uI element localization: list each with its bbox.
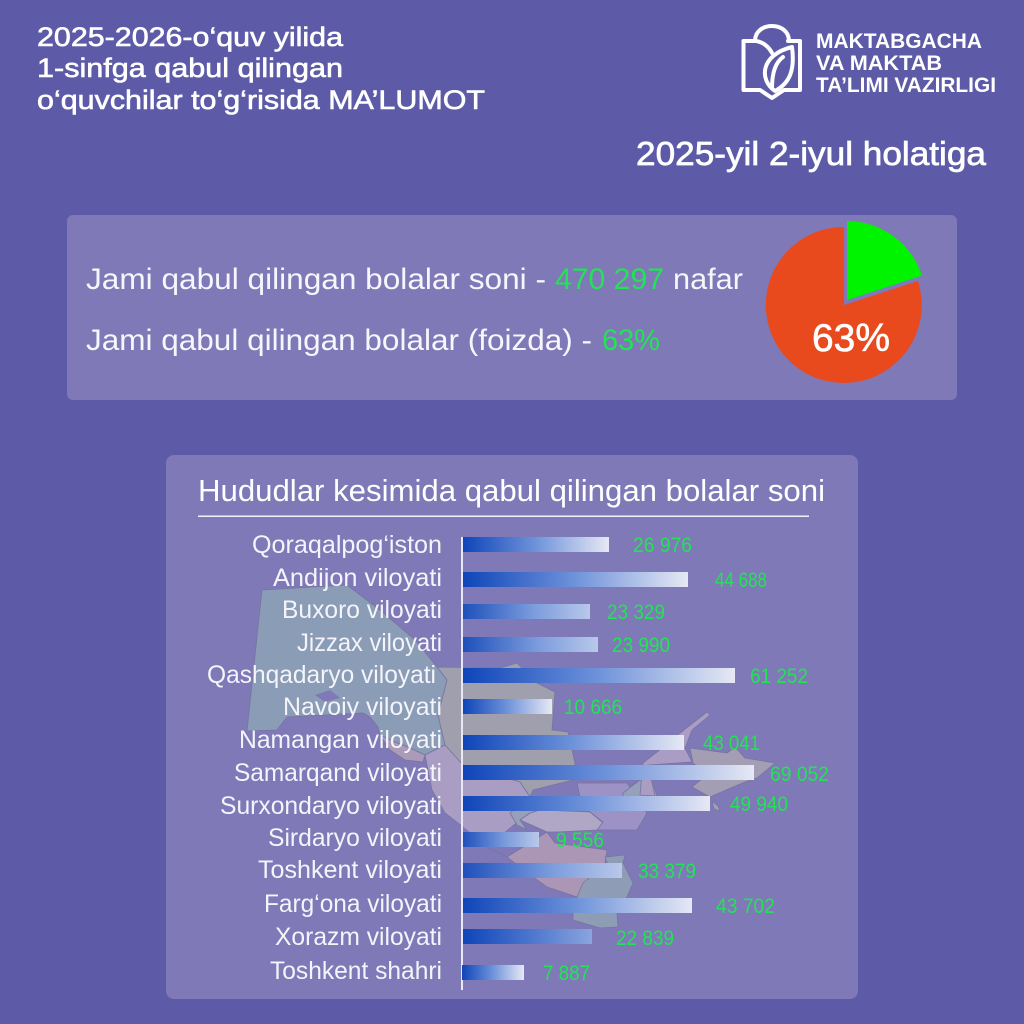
row: Namangan viloyati: Namangan viloyati (239, 726, 442, 754)
row: Toshkent shahri: 7 887 (543, 962, 590, 985)
row: Andijon viloyati: Andijon viloyati (273, 564, 442, 592)
row: Surxondaryo viloyati (220, 792, 788, 820)
title: 2025-2026-o‘quv yilida (37, 22, 344, 52)
row: Navoiy viloyati (283, 693, 622, 721)
logo text: MAKTABGACHA (816, 30, 982, 53)
row: Xorazm viloyati: 22 839 (616, 927, 674, 950)
row: Namangan viloyati (239, 726, 760, 755)
row: Buxoro viloyati (282, 596, 665, 624)
row: Farg‘ona viloyati (264, 890, 775, 918)
row: Qashqadaryo viloyati: 61 252 (750, 665, 808, 688)
row: Qashqadaryo viloyati: Qashqadaryo viloyati (207, 661, 436, 689)
row: Jizzax viloyati: 23 990 (612, 634, 670, 657)
row: Qashqadaryo viloyati (207, 661, 808, 689)
total count text (86, 263, 743, 296)
row: Samarqand viloyati (234, 759, 829, 787)
row: Sirdaryo viloyati: Sirdaryo viloyati (268, 824, 442, 852)
row: Buxoro viloyati: Buxoro viloyati (282, 596, 442, 624)
row: Andijon viloyati: 44 688 (715, 569, 767, 592)
row: Andijon viloyati (273, 564, 767, 592)
icon: open book with leaf (744, 26, 800, 98)
row: Namangan viloyati: 43 041 (703, 732, 760, 755)
axis (461, 537, 463, 990)
row: Buxoro viloyati: 23 329 (607, 601, 665, 624)
total count text: Jami qabul qilingan bolalar soni - (86, 263, 546, 296)
panel: totals (67, 215, 957, 400)
date heading: 2025-yil 2-iyul holatiga (636, 135, 987, 172)
row: Toshkent viloyati (258, 856, 696, 884)
title (37, 22, 485, 115)
row: Toshkent shahri (270, 957, 590, 985)
logo text (816, 30, 996, 97)
row: Xorazm viloyati: Xorazm viloyati (275, 923, 442, 951)
row: Navoiy viloyati: Navoiy viloyati (283, 693, 442, 721)
row: Qoraqalpog‘iston: 26 976 (633, 534, 692, 557)
total percent text: Jami qabul qilingan bolalar (foizda) - (86, 324, 592, 357)
row: Toshkent viloyati: 33 379 (638, 860, 696, 883)
logo: ministry (744, 26, 996, 98)
logo text: VA MAKTAB (816, 52, 942, 75)
row: Surxondaryo viloyati: 49 940 (730, 793, 788, 816)
total percent text: 63% (602, 324, 660, 357)
pie chart (766, 221, 922, 383)
heading underline (198, 516, 809, 517)
row: Xorazm viloyati (275, 923, 674, 951)
total count text: 470 297 (555, 263, 664, 296)
row: Samarqand viloyati: Samarqand viloyati (234, 759, 442, 787)
row: Qoraqalpog‘iston: Qoraqalpog‘iston (252, 531, 442, 559)
row: Jizzax viloyati: Jizzax viloyati (297, 629, 442, 657)
logo text: TA’LIMI VAZIRLIGI (816, 74, 996, 97)
title: o‘quvchilar to‘g‘risida MA’LUMOT (37, 85, 485, 115)
row: Samarqand viloyati: 69 052 (770, 763, 829, 786)
row: Toshkent viloyati: Toshkent viloyati (258, 856, 442, 884)
row: Qoraqalpog‘iston (252, 531, 692, 559)
row: Farg‘ona viloyati: 43 702 (716, 895, 775, 918)
total count text: nafar (673, 263, 743, 296)
row: Sirdaryo viloyati: 9 556 (556, 829, 604, 852)
row: Toshkent shahri: Toshkent shahri (270, 957, 442, 985)
row: Navoiy viloyati: 10 666 (564, 696, 622, 719)
chart heading: Hududlar kesimida qabul qilingan bolalar soni (198, 473, 825, 508)
map of Uzbekistan (247, 585, 775, 928)
title: 1-sinfga qabul qilingan (37, 53, 343, 83)
row: Surxondaryo viloyati: Surxondaryo viloyati (220, 792, 442, 820)
row: Sirdaryo viloyati (268, 824, 604, 852)
pie chart: 63% (812, 317, 890, 360)
row: Farg‘ona viloyati: Farg‘ona viloyati (264, 890, 442, 918)
panel: regions (166, 455, 858, 999)
row: Jizzax viloyati (297, 629, 670, 657)
